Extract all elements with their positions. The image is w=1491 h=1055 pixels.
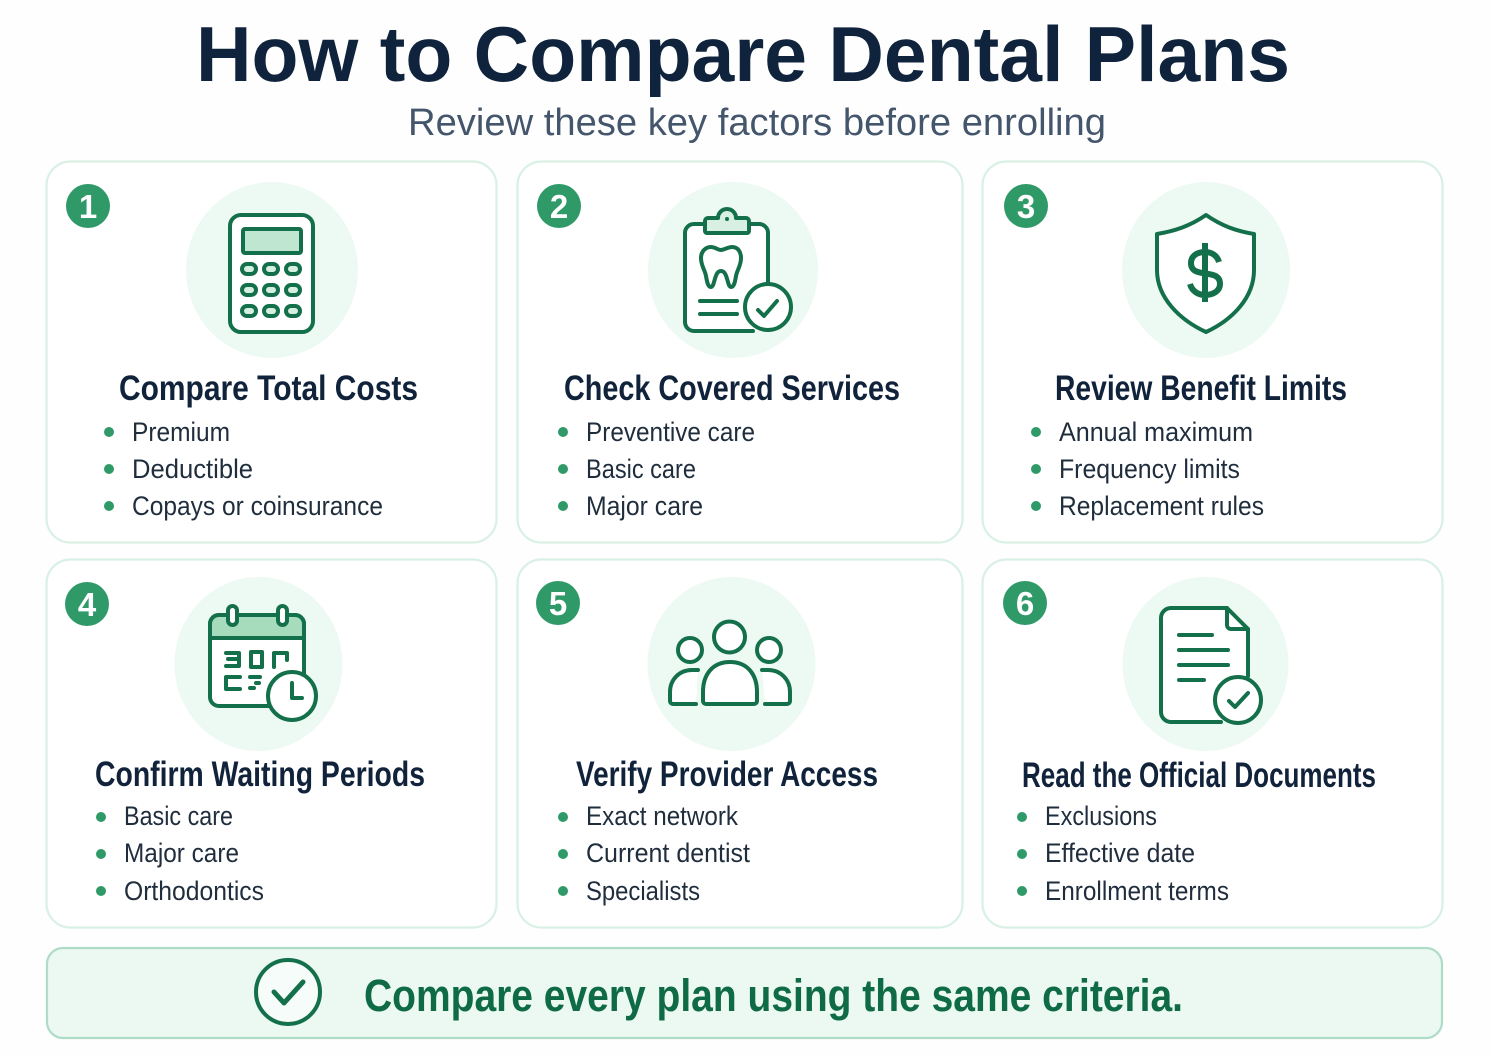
icon: clipboard with tooth	[648, 182, 818, 358]
panel: compare total costs	[46, 162, 496, 542]
badge 3: 3	[1017, 188, 1035, 225]
list: provider items: Exact network	[586, 801, 738, 831]
callout text: Compare every plan using the same criteria.	[364, 970, 1183, 1021]
list: limit items: Annual maximum	[1059, 417, 1253, 447]
icon: group of people	[648, 577, 816, 751]
badge 6	[1003, 581, 1047, 625]
list: document items: Effective date	[1045, 838, 1195, 868]
badge 3	[1004, 184, 1048, 228]
badge 1: 1	[79, 188, 97, 225]
icon: shield with dollar	[1122, 182, 1290, 358]
list: provider items: Current dentist	[586, 838, 750, 868]
list: service items: Preventive care	[586, 417, 755, 447]
title: How to Compare Dental Plans	[196, 10, 1290, 98]
badge 4	[65, 582, 109, 626]
list: cost items: Premium	[132, 417, 230, 447]
badge 1	[66, 184, 110, 228]
list: document items: Exclusions	[1045, 801, 1157, 831]
badge 5: 5	[549, 585, 567, 622]
panel: review benefit limits	[982, 162, 1442, 542]
badge 2: 2	[550, 188, 568, 225]
panel: verify provider access	[518, 560, 962, 928]
heading: read the official documents: Read the Official Documents	[1022, 756, 1376, 795]
list: waiting items: Basic care	[124, 801, 233, 831]
panel: confirm waiting periods	[46, 560, 496, 928]
list: document items: Enrollment terms	[1045, 876, 1229, 906]
list: waiting items: Orthodontics	[124, 876, 264, 906]
list: document items	[1017, 801, 1229, 906]
list: limit items	[1031, 417, 1264, 521]
heading: confirm waiting periods: Confirm Waiting Periods	[95, 755, 425, 794]
subtitle: Review these key factors before enrolling	[408, 102, 1106, 144]
icon: document with check	[1122, 577, 1288, 751]
list: provider items: Specialists	[586, 876, 700, 906]
heading: check covered services: Check Covered Services	[564, 369, 900, 408]
list: cost items	[104, 417, 383, 521]
list: waiting items	[96, 801, 264, 906]
list: service items: Major care	[586, 491, 703, 521]
callout banner	[47, 948, 1442, 1038]
icon: check circle	[256, 960, 320, 1024]
list: service items: Basic care	[586, 454, 696, 484]
list: limit items: Replacement rules	[1059, 491, 1264, 521]
badge 4: 4	[78, 586, 97, 623]
list: cost items: Copays or coinsurance	[132, 491, 383, 521]
badge 6: 6	[1016, 585, 1034, 622]
badge 5	[536, 581, 580, 625]
heading: compare total costs: Compare Total Costs	[119, 369, 418, 408]
heading: verify provider access: Verify Provider Access	[576, 755, 878, 794]
icon: calculator	[186, 182, 358, 358]
list: limit items: Frequency limits	[1059, 454, 1240, 484]
icon: calendar with clock	[174, 577, 342, 751]
panel: check covered services	[518, 162, 962, 542]
panel: read the official documents	[982, 560, 1442, 928]
list: provider items	[558, 801, 750, 906]
badge 2	[537, 184, 581, 228]
list: cost items: Deductible	[132, 454, 253, 484]
list: service items	[558, 417, 755, 521]
heading: review benefit limits: Review Benefit Limits	[1055, 369, 1347, 408]
list: waiting items: Major care	[124, 838, 239, 868]
